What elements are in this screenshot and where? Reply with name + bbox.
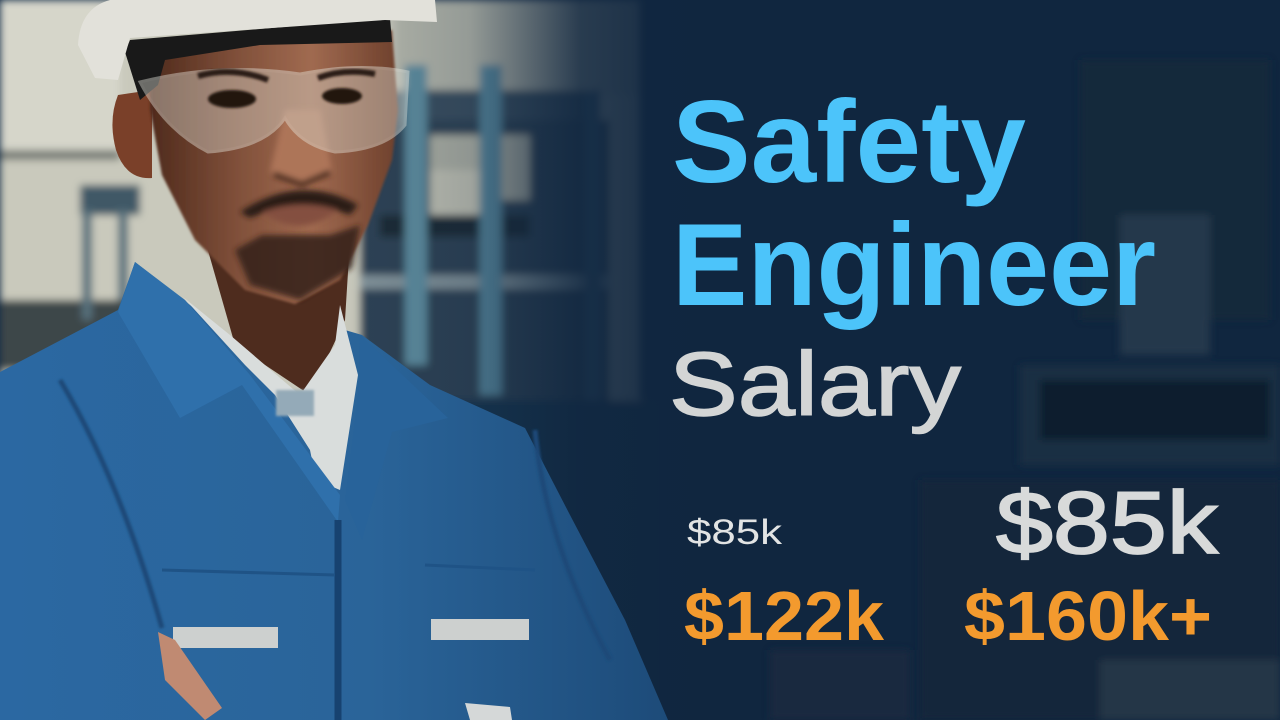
mustache and beard — [240, 190, 358, 218]
salary figures — [684, 473, 1219, 655]
hand — [158, 632, 222, 720]
jacket — [0, 262, 668, 720]
arm seams — [60, 380, 162, 628]
nose — [270, 110, 332, 182]
lips — [262, 204, 338, 226]
figure: large $85k: $85k — [996, 473, 1219, 572]
safety glasses — [140, 67, 408, 152]
cuff — [465, 703, 512, 720]
title line: Engineer: Engineer — [672, 199, 1156, 330]
title line: Safety: Safety — [672, 76, 1026, 207]
figure: $122k: $122k — [684, 577, 884, 655]
figure: $160k+: $160k+ — [964, 577, 1212, 655]
title — [669, 76, 1156, 435]
shirt pattern — [276, 390, 314, 416]
neck — [205, 240, 350, 395]
facial features — [235, 110, 360, 300]
left collar flap — [118, 262, 340, 522]
hard hat — [78, 0, 437, 80]
right collar flap — [345, 335, 448, 540]
hair — [125, 18, 392, 100]
shirt collar — [183, 297, 358, 490]
worker photo illustration — [0, 0, 668, 720]
ear — [112, 90, 152, 178]
eyes — [198, 72, 375, 108]
title line: Salary: Salary — [669, 335, 961, 435]
reflective strips — [173, 627, 278, 648]
face — [150, 30, 398, 304]
figure: small $85k: $85k — [687, 513, 783, 552]
